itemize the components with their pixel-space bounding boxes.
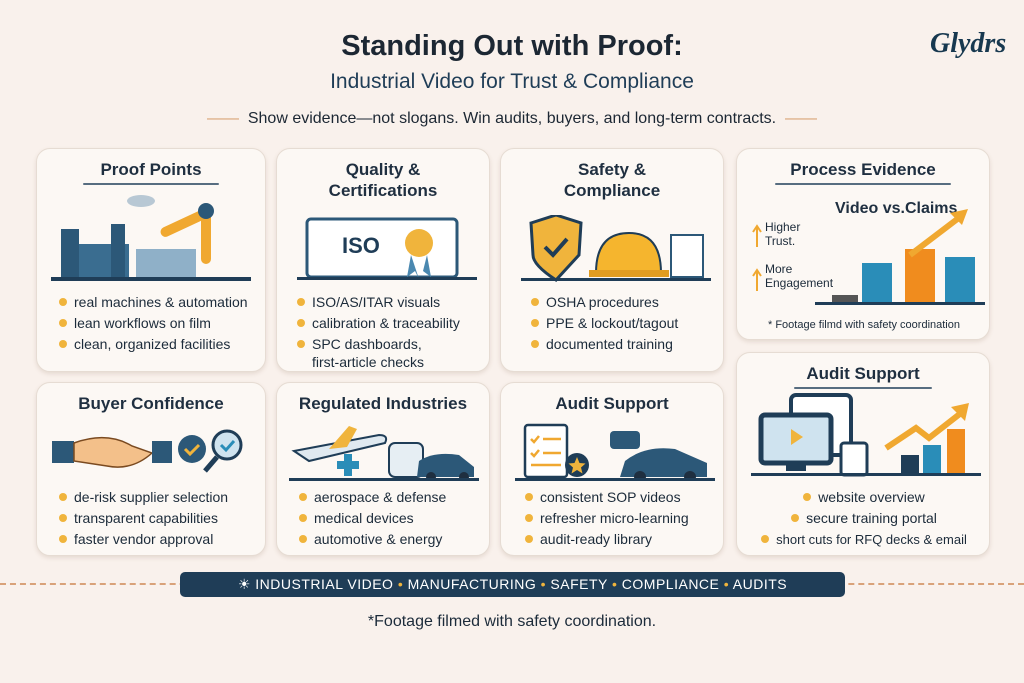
icon: plane medical car bbox=[289, 426, 479, 481]
icon: ISO certificate bbox=[297, 218, 477, 280]
panel: buyer confidence: Buyer Confidence bbox=[78, 394, 224, 413]
dashed divider line bbox=[0, 583, 1024, 585]
panel: quality: Quality & bbox=[346, 160, 420, 179]
panel: safety: Safety & bbox=[578, 160, 646, 179]
title: Standing Out with Proof: bbox=[341, 30, 683, 62]
panel: safety bbox=[500, 148, 724, 372]
panel: regulated industries: medical devices bbox=[314, 510, 414, 526]
panel: proof points: real machines & automation bbox=[74, 294, 248, 310]
panel: proof points: Proof Points bbox=[100, 160, 202, 179]
panel: audit support (right): Audit Support bbox=[806, 364, 920, 383]
chart: video vs claims: Higher bbox=[765, 220, 800, 234]
panel: proof points: clean, organized facilities bbox=[74, 336, 230, 352]
panel: buyer confidence: faster vendor approval bbox=[74, 531, 213, 547]
panel: regulated industries: aerospace & defense bbox=[314, 489, 446, 505]
panel: proof points: lean workflows on film bbox=[74, 315, 211, 331]
panel: audit support (middle) bbox=[500, 382, 724, 556]
panel: quality: ISO/AS/ITAR visuals bbox=[312, 294, 440, 310]
banner: keywords bbox=[180, 572, 845, 597]
chart: video vs claims: Video vs.Claims bbox=[835, 200, 958, 217]
panel: quality: first-article checks bbox=[312, 354, 424, 370]
panel: audit support (right): website overview bbox=[818, 489, 925, 505]
logo: Glydrs bbox=[930, 28, 1006, 59]
icon: shield helmet bbox=[521, 215, 711, 282]
panel: regulated industries: automotive & energy bbox=[314, 531, 442, 547]
panel: quality: calibration & traceability bbox=[312, 315, 460, 331]
panel: process evidence bbox=[736, 148, 990, 340]
panel: safety: documented training bbox=[546, 336, 673, 352]
panel: quality: SPC dashboards, bbox=[312, 336, 422, 352]
panel: audit support (right): secure training portal bbox=[806, 510, 937, 526]
panel: buyer confidence: transparent capabilities bbox=[74, 510, 218, 526]
chart: video vs claims: Trust. bbox=[765, 234, 795, 248]
icon: screens growth chart bbox=[751, 393, 981, 476]
panel: safety: PPE & lockout/tagout bbox=[546, 315, 678, 331]
panel: safety: OSHA procedures bbox=[546, 294, 659, 310]
panel: audit support (middle): audit-ready library bbox=[540, 531, 652, 547]
panel: audit support (right) bbox=[736, 352, 990, 556]
panel: safety: Compliance bbox=[564, 181, 660, 200]
banner: keywords: ☀ INDUSTRIAL VIDEO • MANUFACTURING • SAFETY • COMPLIANCE • AUDITS bbox=[238, 576, 787, 592]
panel: audit support (middle): Audit Support bbox=[555, 394, 669, 413]
panel: audit support (middle): refresher micro-learning bbox=[540, 510, 689, 526]
icon: factory robot bbox=[51, 195, 251, 281]
panel: audit support (middle): consistent SOP videos bbox=[540, 489, 681, 505]
tagline: —— Show evidence—not slogans. Win audits, buyers, and long-term contracts. —— bbox=[207, 110, 817, 127]
panel: proof points bbox=[36, 148, 266, 372]
chart: video vs claims bbox=[752, 200, 985, 305]
panel: process evidence: Process Evidence bbox=[790, 160, 936, 179]
subtitle: Industrial Video for Trust & Compliance bbox=[330, 70, 694, 93]
panel: buyer confidence: de-risk supplier selection bbox=[74, 489, 228, 505]
icon: ISO certificate: ISO bbox=[342, 233, 380, 258]
chart: video vs claims: Engagement bbox=[765, 276, 834, 290]
panel: quality bbox=[276, 148, 490, 372]
panel: regulated industries: Regulated Industries bbox=[299, 394, 467, 413]
panel: quality: Certifications bbox=[329, 181, 437, 200]
panel: audit support (right): short cuts for RFQ decks & email bbox=[776, 532, 967, 547]
chart: video vs claims: More bbox=[765, 262, 793, 276]
icon: handshake bbox=[52, 430, 242, 473]
panel: buyer confidence bbox=[36, 382, 266, 556]
footnote: *Footage filmed with safety coordination. bbox=[368, 613, 656, 630]
panel: regulated industries bbox=[276, 382, 490, 556]
icon: checklist car bbox=[515, 424, 715, 481]
panel: process evidence: * Footage filmd with safety coordination bbox=[768, 319, 960, 331]
